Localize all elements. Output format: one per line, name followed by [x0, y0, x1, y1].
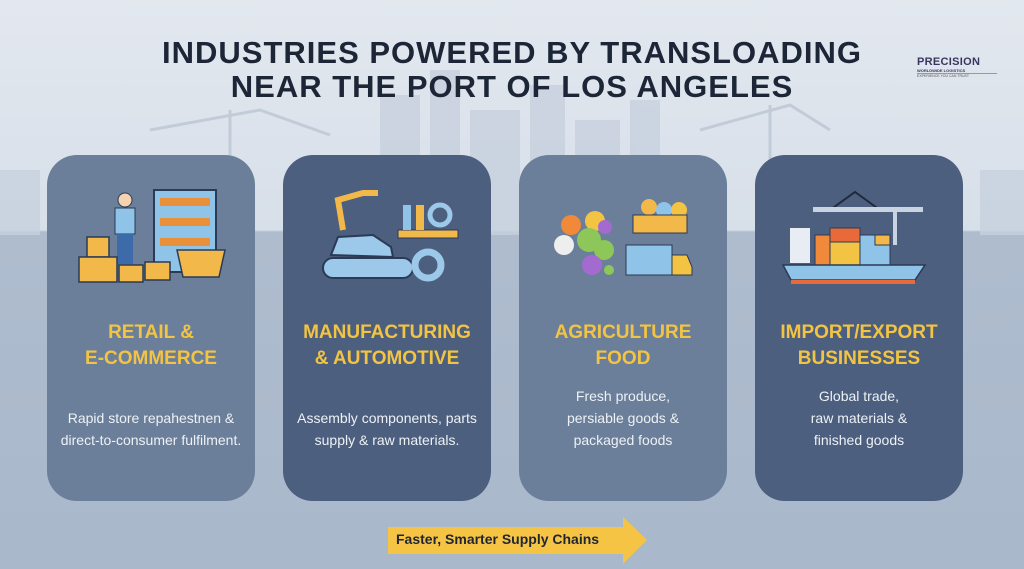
arrow: faster smarter supply chains: Faster, Smarter Supply Chains — [396, 531, 599, 547]
logo: WORLDWIDE LOGISTICS — [917, 68, 965, 73]
title — [162, 35, 862, 104]
heading: retail: RETAIL & — [108, 322, 194, 343]
panel: import/export — [755, 155, 963, 501]
text: agriculture — [567, 388, 679, 448]
text: retail: direct-to-consumer fulfilment. — [61, 432, 241, 448]
icon: retail — [78, 189, 226, 283]
heading: import/export: BUSINESSES — [798, 348, 920, 369]
heading: import/export — [780, 322, 938, 369]
background skyline — [0, 70, 1024, 235]
heading: import/export: IMPORT/EXPORT — [780, 322, 938, 343]
heading: retail: E-COMMERCE — [85, 348, 217, 369]
panel: agriculture — [519, 155, 727, 501]
logo: PRECISION — [917, 56, 980, 68]
text: retail — [61, 410, 241, 448]
icon: manufacturing — [322, 190, 458, 282]
icon: agriculture — [554, 199, 692, 276]
text: manufacturing — [297, 410, 477, 448]
heading: manufacturing: & AUTOMOTIVE — [315, 348, 459, 369]
text: agriculture: persiable goods & — [567, 410, 679, 426]
heading: manufacturing — [303, 322, 471, 369]
panel: retail — [47, 155, 255, 501]
text: import/export: Global trade, — [819, 388, 899, 404]
title: NEAR THE PORT OF LOS ANGELES — [231, 69, 793, 104]
icon: ship — [782, 190, 926, 284]
heading: agriculture: FOOD — [596, 348, 650, 369]
logo: EXPERIENCE YOU CAN TRUST — [917, 74, 969, 78]
title: INDUSTRIES POWERED BY TRANSLOADING — [162, 35, 862, 70]
text: agriculture: packaged foods — [574, 432, 672, 448]
panel: manufacturing — [283, 155, 491, 501]
text: import/export: raw materials & — [811, 410, 907, 426]
text: import/export: finished goods — [814, 432, 904, 448]
text: retail: Rapid store repahestnen & — [68, 410, 234, 426]
logo — [917, 56, 997, 78]
text: import/export — [811, 388, 907, 448]
heading: retail — [85, 322, 217, 369]
heading: agriculture: AGRICULTURE — [555, 322, 691, 343]
heading: agriculture — [555, 322, 691, 369]
text: agriculture: Fresh produce, — [576, 388, 670, 404]
arrow: faster smarter supply chains — [388, 517, 647, 564]
heading: manufacturing: MANUFACTURING — [303, 322, 471, 343]
text: manufacturing: Assembly components, parts — [297, 410, 477, 426]
text: manufacturing: supply & raw materials. — [315, 432, 459, 448]
